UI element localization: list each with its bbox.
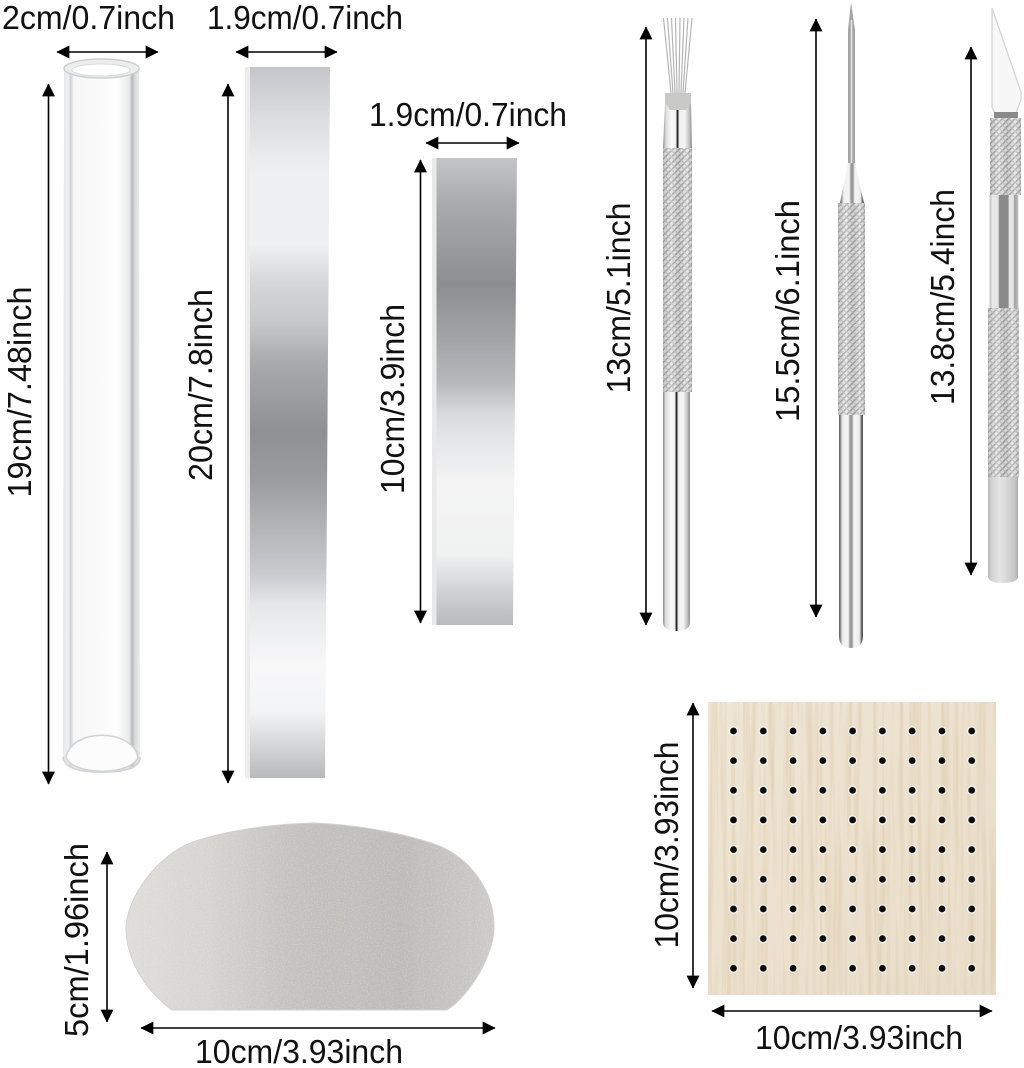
product: metal scraper: [122, 820, 498, 1015]
dimension: board height: 10cm/3.93inch: [648, 742, 685, 948]
dimension: tube length: 19cm/7.48inch: [1, 286, 38, 498]
product: craft knife: [988, 8, 1021, 583]
dimension: long strip length: 20cm/7.8inch: [182, 289, 219, 481]
dimension: board width: 10cm/3.93inch: [755, 1019, 963, 1056]
dimension: scraper height: 5cm/1.96inch: [58, 843, 95, 1037]
product: wooden blocking board: [705, 700, 1000, 998]
dimension: craft knife length: 13.8cm/5.4inch: [924, 189, 961, 405]
product: clear acrylic tube: [63, 59, 140, 772]
product: short metal strip: [432, 158, 517, 625]
product: feather wire tool: [663, 18, 692, 631]
product: needle tool: [838, 2, 865, 648]
dimension: short strip width: 1.9cm/0.7inch: [369, 96, 567, 133]
product: long metal strip: [245, 67, 330, 778]
dimension: tube width: 2cm/0.7inch: [2, 0, 175, 36]
dimension: feather tool length: 13cm/5.1inch: [600, 202, 637, 394]
dimension: needle tool length: 15.5cm/6.1inch: [769, 200, 806, 422]
dimension: short strip length: 10cm/3.9inch: [374, 304, 411, 494]
dimension: long strip width: 1.9cm/0.7inch: [207, 0, 403, 36]
